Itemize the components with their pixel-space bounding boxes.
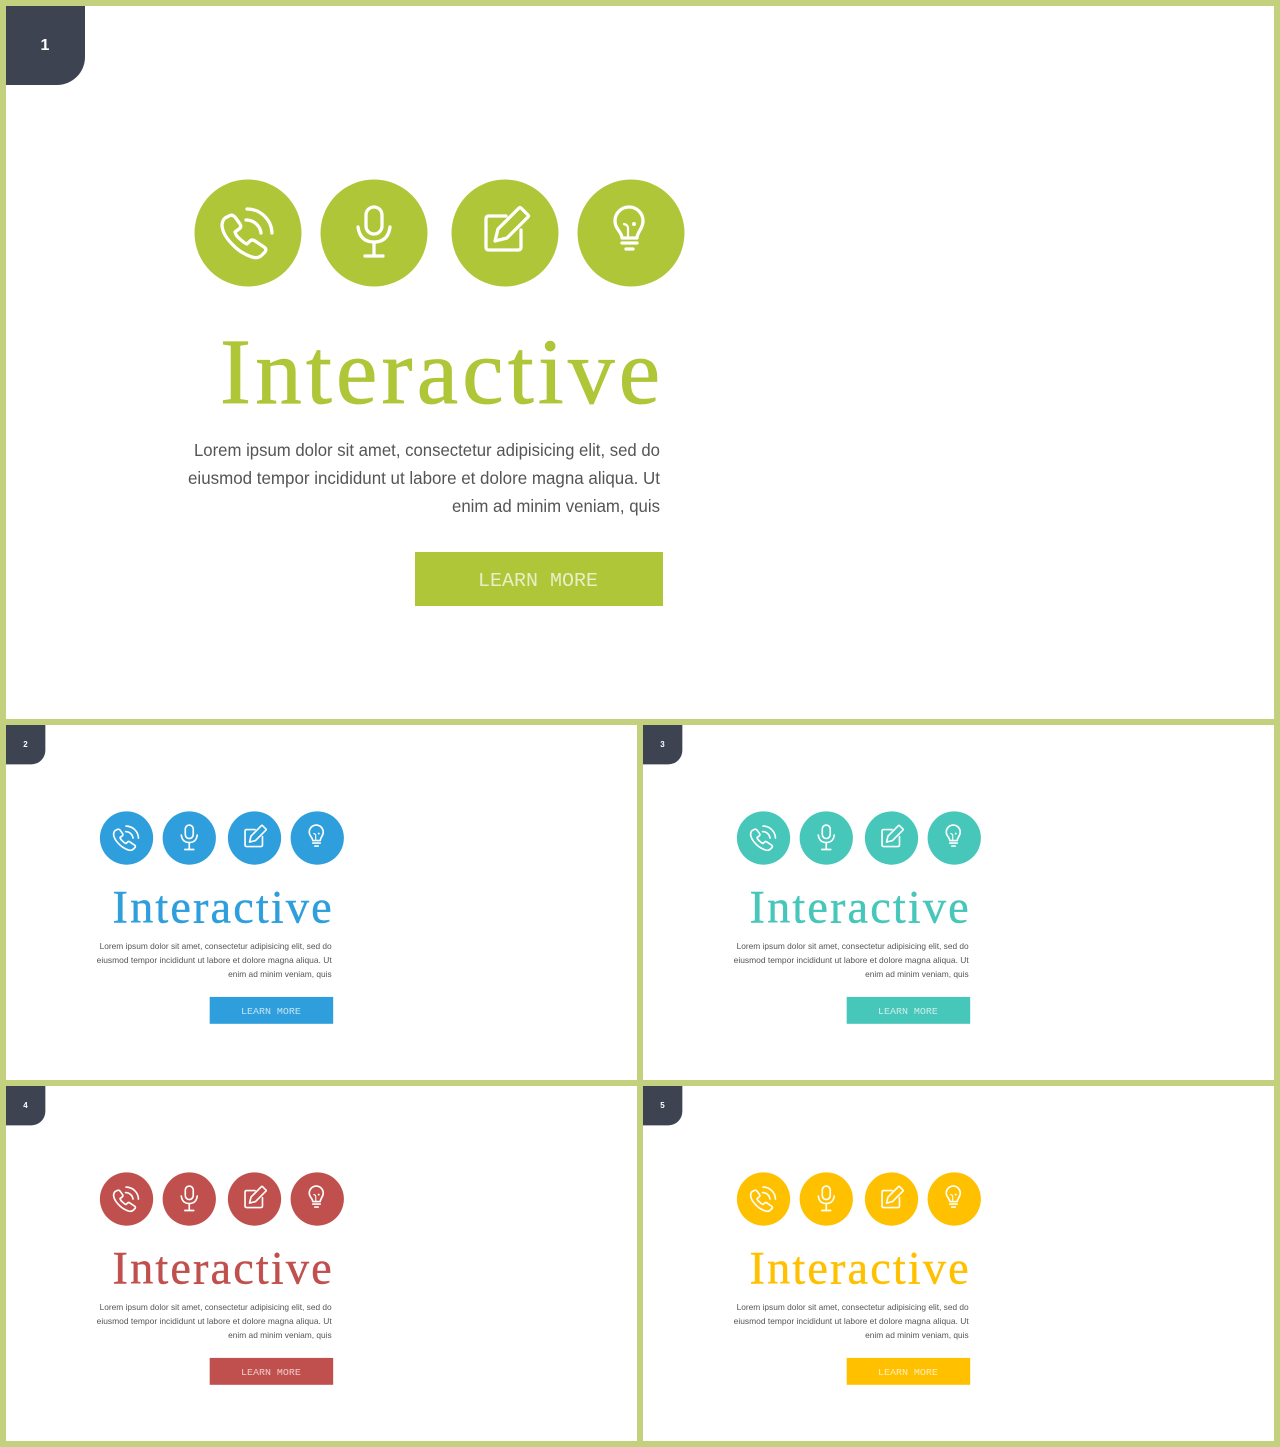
text block — [97, 1302, 332, 1340]
button: learn more: LEARN MORE — [878, 1006, 938, 1017]
button: learn more: LEARN MORE — [241, 1006, 301, 1017]
icon: edit — [865, 811, 918, 865]
text block: enim ad minim veniam, quis — [228, 1330, 332, 1340]
badge: number 1: 1 — [41, 37, 50, 54]
badge: number 3: 3 — [660, 740, 665, 749]
icon: phone — [737, 1172, 790, 1226]
badge: number 2: 2 — [23, 740, 28, 749]
text block: enim ad minim veniam, quis — [228, 969, 332, 979]
badge: number 2 — [6, 725, 45, 764]
heading: Interactive — [750, 1244, 969, 1295]
button: learn more — [210, 997, 333, 1024]
button: learn more: LEARN MORE — [878, 1367, 938, 1378]
button: learn more: LEARN MORE — [241, 1367, 301, 1378]
icon: light bulb — [291, 811, 344, 865]
icon row — [100, 1172, 344, 1226]
icon: edit — [228, 811, 281, 865]
text block: Lorem ipsum dolor sit amet, consectetur adipisicing elit, sed do — [194, 440, 660, 460]
text block: enim ad minim veniam, quis — [865, 969, 969, 979]
button: learn more — [415, 552, 663, 606]
panel: slide 4 red — [6, 1086, 637, 1441]
text block: Lorem ipsum dolor sit amet, consectetur adipisicing elit, sed do — [737, 1302, 969, 1312]
button: learn more — [847, 1358, 970, 1385]
icon: microphone — [320, 180, 428, 286]
icon row — [194, 180, 684, 286]
heading: Interactive — [113, 883, 332, 934]
icon: light bulb — [578, 180, 684, 286]
text block — [734, 941, 969, 979]
icon: phone — [100, 1172, 153, 1226]
icon row — [737, 1172, 981, 1226]
button: learn more: LEARN MORE — [478, 570, 598, 592]
icon: light bulb — [291, 1172, 344, 1226]
icon: phone — [100, 811, 153, 865]
text block: eiusmod tempor incididunt ut labore et dolore magna aliqua. Ut — [734, 955, 969, 965]
icon: microphone — [163, 1172, 216, 1226]
heading: Interactive — [113, 1244, 332, 1295]
button: learn more — [210, 1358, 333, 1385]
text block: eiusmod tempor incididunt ut labore et dolore magna aliqua. Ut — [97, 955, 332, 965]
badge: number 4 — [6, 1086, 45, 1125]
heading: Interactive — [750, 883, 969, 934]
icon: microphone — [800, 1172, 853, 1226]
text block — [97, 941, 332, 979]
text block: eiusmod tempor incididunt ut labore et dolore magna aliqua. Ut — [734, 1316, 969, 1326]
text block: Lorem ipsum dolor sit amet, consectetur adipisicing elit, sed do — [737, 941, 969, 951]
icon: edit — [865, 1172, 918, 1226]
panel: slide 2 blue — [6, 725, 637, 1080]
badge: number 5 — [643, 1086, 682, 1125]
text block — [734, 1302, 969, 1340]
text block: eiusmod tempor incididunt ut labore et dolore magna aliqua. Ut — [97, 1316, 332, 1326]
button: learn more — [847, 997, 970, 1024]
panel: slide 1 green — [6, 6, 1274, 719]
text block — [188, 440, 660, 516]
icon row — [737, 811, 981, 865]
badge: number 3 — [643, 725, 682, 764]
icon: light bulb — [928, 1172, 981, 1226]
icon: microphone — [800, 811, 853, 865]
icon row — [100, 811, 344, 865]
text block: eiusmod tempor incididunt ut labore et dolore magna aliqua. Ut — [188, 468, 660, 488]
icon: edit — [228, 1172, 281, 1226]
panel: slide 5 yellow — [643, 1086, 1274, 1441]
panel: slide 3 teal — [643, 725, 1274, 1080]
badge: number 5: 5 — [660, 1101, 665, 1110]
text block: Lorem ipsum dolor sit amet, consectetur adipisicing elit, sed do — [100, 1302, 332, 1312]
icon: phone — [194, 180, 302, 286]
icon: phone — [737, 811, 790, 865]
text block: enim ad minim veniam, quis — [865, 1330, 969, 1340]
icon: edit — [452, 180, 558, 286]
text block: enim ad minim veniam, quis — [452, 496, 660, 516]
icon: light bulb — [928, 811, 981, 865]
text block: Lorem ipsum dolor sit amet, consectetur adipisicing elit, sed do — [100, 941, 332, 951]
icon: microphone — [163, 811, 216, 865]
badge: number 4: 4 — [23, 1101, 28, 1110]
badge: number 1 — [6, 6, 85, 85]
heading: Interactive — [220, 321, 660, 424]
